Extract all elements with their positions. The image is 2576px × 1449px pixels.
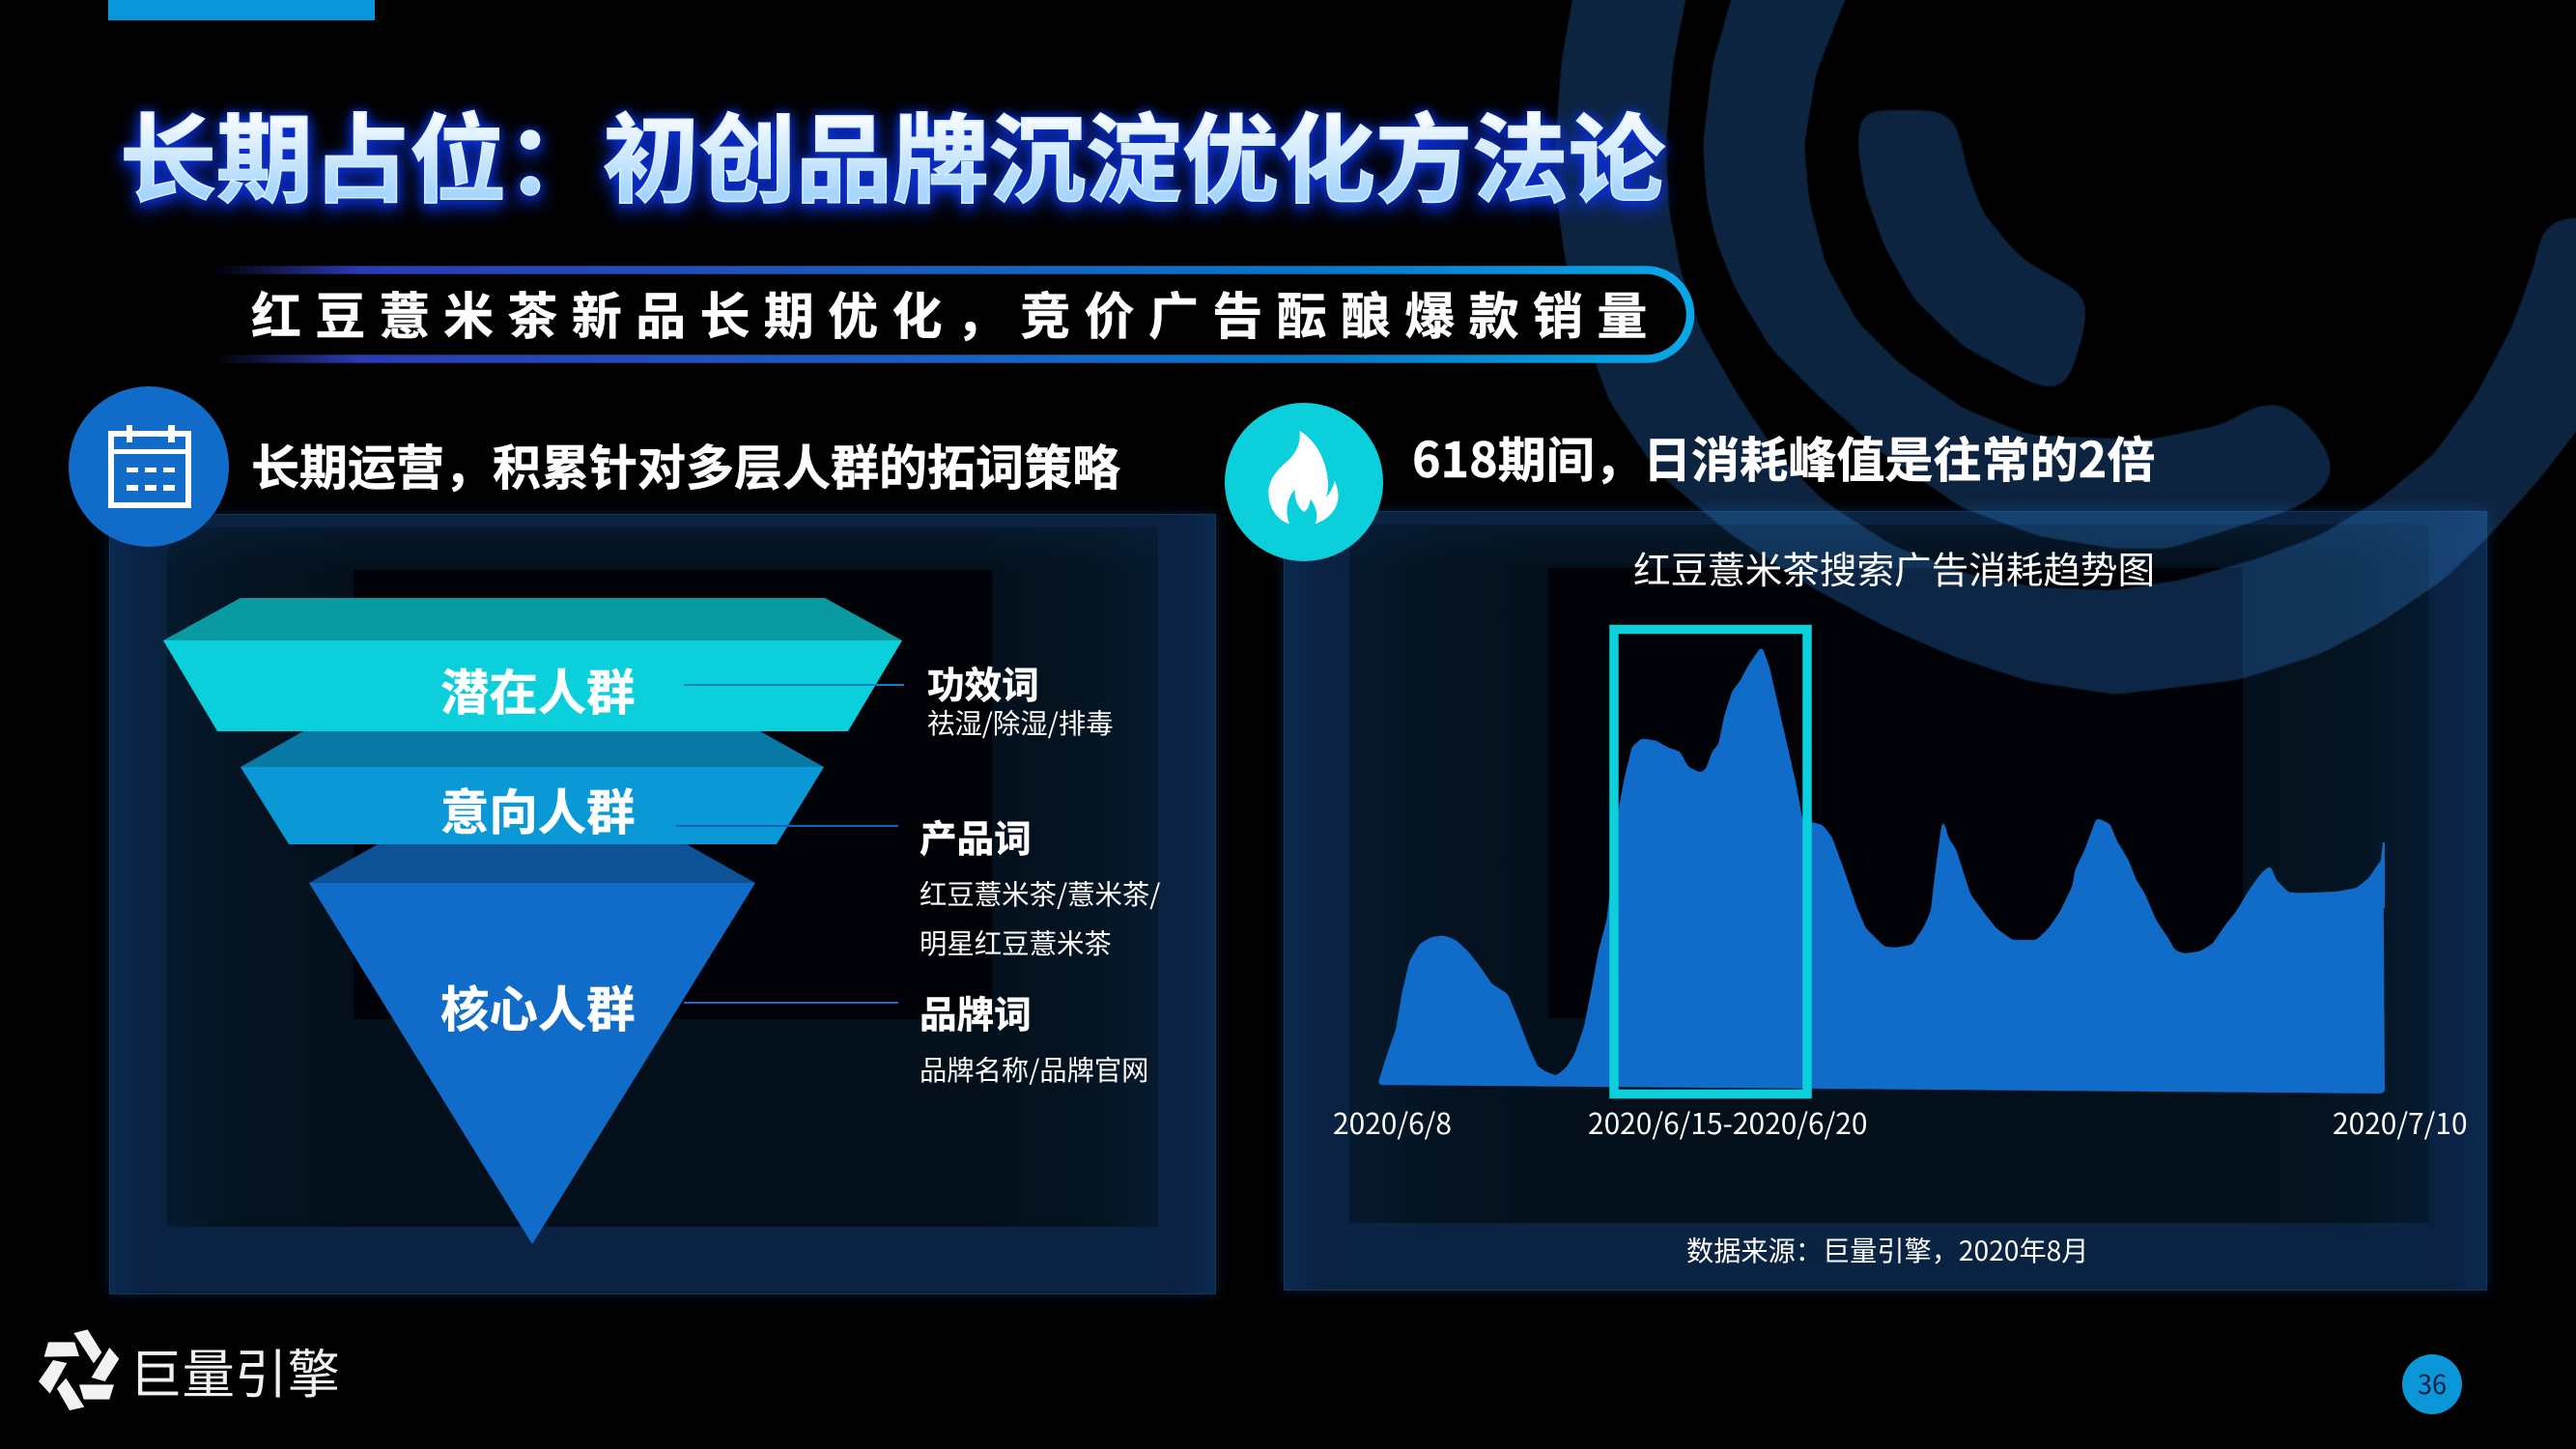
keyword heading: product: 产品词 (920, 810, 1032, 864)
icon: flame (1225, 403, 1383, 561)
logo mark (39, 1329, 120, 1410)
keyword detail: product line 1: 红豆薏米茶/薏米茶/ (920, 873, 1160, 913)
keyword detail: efficacy: 祛湿/除湿/排毒 (927, 702, 1114, 742)
heading right: 618期间，日消耗峰值是往常的2倍 (1412, 422, 2155, 492)
panel: funnel background (109, 514, 1216, 1294)
funnel layer: core audience (309, 844, 755, 1244)
keyword heading: brand: 品牌词 (920, 985, 1032, 1039)
funnel (163, 598, 904, 1244)
keyword heading: efficacy: 功效词 (927, 656, 1039, 710)
funnel layer: potential audience (163, 598, 902, 731)
keyword detail: brand: 品牌名称/品牌官网 (920, 1049, 1148, 1089)
accent bar (108, 0, 375, 20)
page number (2402, 1354, 2462, 1414)
funnel label: intent: 意向人群 (440, 774, 636, 844)
subtitle pill (217, 266, 1694, 363)
chart title: 红豆薏米茶搜索广告消耗趋势图 (1633, 541, 2155, 595)
keyword detail: product line 2: 明星红豆薏米茶 (920, 923, 1112, 962)
title: 长期占位：初创品牌沉淀优化方法论 (120, 82, 1665, 222)
axis label start: 2020/6/8 (1333, 1100, 1452, 1143)
subtitle text: 红豆薏米茶新品长期优化，竞价广告酝酿爆款销量 (251, 276, 1661, 349)
funnel label: potential: 潜在人群 (440, 654, 636, 724)
icon: calendar (69, 386, 229, 547)
heading left: 长期运营，积累针对多层人群的拓词策略 (251, 430, 1120, 499)
panel: chart background (1284, 511, 2487, 1291)
highlight box (1614, 630, 1807, 1094)
page number: 36 (2418, 1364, 2447, 1402)
funnel layer: intent audience (241, 731, 824, 844)
logo text: 巨量引擎 (129, 1332, 340, 1408)
axis label end: 2020/7/10 (2333, 1100, 2468, 1143)
connector lines (676, 685, 904, 1003)
data source: 数据来源：巨量引擎，2020年8月 (1686, 1230, 2088, 1269)
axis label highlight: 2020/6/15-2020/6/20 (1588, 1100, 1868, 1143)
funnel label: core: 核心人群 (440, 971, 636, 1041)
